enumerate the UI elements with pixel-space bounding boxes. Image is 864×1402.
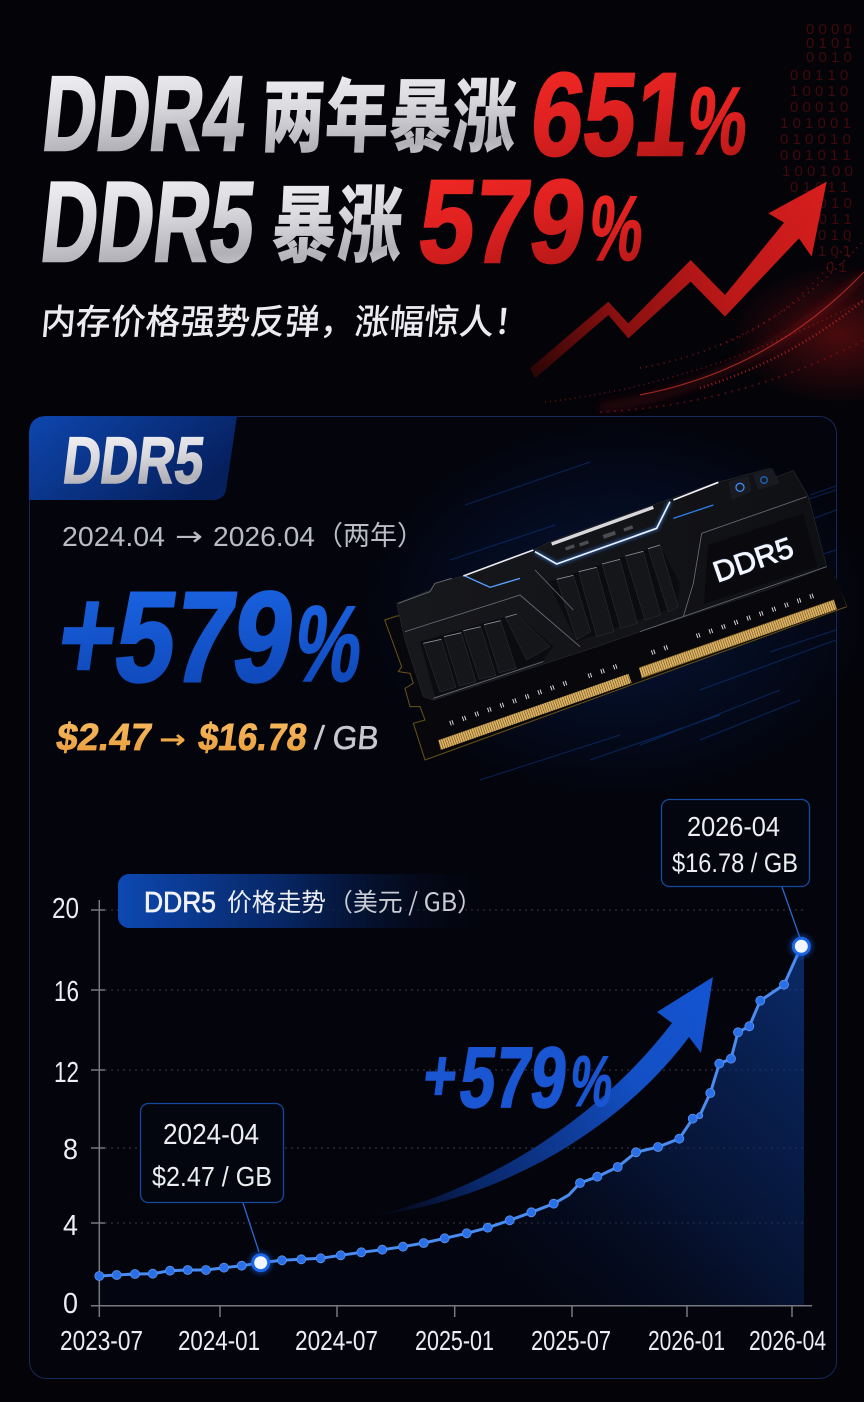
y axis labels: 20 [52, 893, 79, 925]
y axis labels [52, 893, 79, 1320]
x axis labels: 2025-07 [531, 1325, 611, 1356]
panel background [30, 416, 836, 1378]
x axis labels: 2025-01 [415, 1325, 494, 1356]
title line 1: percent: % [683, 68, 753, 175]
big stat: +579%: 579 [107, 567, 303, 709]
chips [450, 593, 820, 723]
circuit board [385, 574, 847, 760]
date range [62, 514, 424, 553]
vents [565, 525, 633, 550]
icon: rising red arrow [530, 182, 827, 378]
x axis labels: 2023-07 [60, 1325, 143, 1356]
chart stat: +579%: % [566, 1042, 618, 1122]
price change [54, 716, 381, 759]
decoration: red data particles: 0 0 0 0 [806, 21, 852, 38]
RAM module [385, 468, 847, 760]
x axis labels: 2024-07 [295, 1325, 378, 1356]
x axis labels: 2024-01 [178, 1325, 260, 1356]
decoration: red data particles: 0 1 0 0 1 0 [780, 131, 851, 148]
x axis labels [60, 1325, 826, 1356]
decoration: blue tech streaks [450, 462, 836, 780]
panel: DDR5 [29, 416, 864, 1378]
chart stat: +579%: + [419, 1036, 462, 1116]
callout: 2026-04: $16.78 / GB [672, 848, 798, 878]
price change: $16.78 [196, 716, 310, 759]
RAM label: DDR5 [709, 531, 798, 589]
left fins [423, 614, 550, 692]
date range: 2024.04 [62, 521, 165, 552]
decoration: red data particles: 0 0 1 0 [806, 49, 852, 66]
date range: 2026.04 [213, 521, 315, 552]
panel glow [360, 420, 864, 800]
highlight point: 2024-04 [249, 1251, 273, 1275]
decoration: red data particles: 0 1 0 1 1 [790, 179, 848, 196]
decoration: red data particles: 0 0 1 1 0 [790, 67, 848, 84]
price line [99, 946, 801, 1276]
decoration: red data particles: 1 0 1 1 [806, 211, 852, 228]
callout: 2024-04: 2024-04 [163, 1119, 259, 1151]
chart title pill: DDR5 [144, 887, 216, 919]
grid lines [105, 910, 804, 1223]
title [35, 49, 753, 288]
price change: → [159, 725, 186, 755]
title line 1: Chinese: 两年暴涨 [259, 53, 520, 169]
decoration: red data particles: 1 0 1 0 0 1 [780, 115, 851, 132]
y axis labels: 0 [63, 1288, 78, 1320]
centre fins [557, 545, 678, 640]
title line 2: DDR5: DDR5 [35, 159, 261, 286]
gold contacts [438, 599, 837, 750]
chart title pill [118, 874, 503, 928]
area under line [99, 946, 804, 1305]
date range: （两年） [316, 514, 424, 553]
y axis labels: 8 [63, 1134, 78, 1166]
data points [95, 980, 789, 1280]
glowing light bar [463, 482, 718, 587]
big stat: +579%: % [288, 583, 371, 704]
decoration: red data particles: 1 0 0 1 0 [790, 83, 848, 100]
decoration: red data particles: 1 0 0 1 0 0 [782, 163, 853, 180]
title line 1: DDR4: DDR4 [38, 54, 251, 173]
y axis labels: 4 [63, 1210, 78, 1242]
axes [91, 900, 812, 1317]
buttons [728, 468, 779, 500]
y axis labels: 12 [54, 1057, 79, 1089]
title line 2: 579: 579 [413, 156, 592, 288]
decoration: red data particles: 0 1 0 [818, 227, 851, 244]
line chart [52, 800, 826, 1356]
big curved arrow [372, 977, 713, 1216]
callout: 2024-04 [140, 1104, 284, 1252]
dark recess centre [548, 545, 680, 642]
decoration: red data particles [545, 21, 864, 412]
heat spreader [397, 468, 827, 700]
date range: → [175, 522, 203, 552]
callout: 2026-04 [662, 800, 810, 938]
subtitle: 内存价格强势反弹，涨幅惊人！ [39, 294, 531, 345]
title line 1: 651: 651 [525, 49, 695, 181]
decoration: red data particles: 0 0 1 0 [806, 195, 852, 212]
fin top highlights [423, 545, 660, 643]
DDR5 plate [704, 513, 817, 604]
x axis labels: 2026-04 [749, 1325, 826, 1356]
price change: $2.47 [54, 716, 155, 759]
highlight point: 2026-04 [789, 934, 813, 958]
decoration: red data particles: 0 1 0 1 [806, 35, 852, 52]
callout: 2026-04: 2026-04 [687, 811, 780, 842]
decoration: red data particles: 1 0 1 [818, 243, 851, 260]
decoration: red data particles: 0 1 [826, 259, 847, 276]
title line 2: percent: % [585, 176, 649, 280]
callout: 2024-04: $2.47 / GB [152, 1161, 272, 1192]
dark recess [420, 613, 553, 697]
chart title pill: （美元 / GB） [328, 883, 482, 919]
y axis labels: 16 [54, 976, 79, 1008]
decoration: red data particles: 0 0 1 0 1 1 [780, 147, 851, 164]
tab: DDR5: DDR5 [59, 424, 208, 498]
decoration: red data particles: 0 0 0 1 0 [790, 99, 848, 116]
title line 2: Chinese: 暴涨 [269, 159, 406, 280]
outline strokes [398, 497, 827, 698]
RAM label: DDR5 [709, 531, 798, 589]
x axis labels: 2026-01 [648, 1325, 725, 1356]
big stat: +579%: + [50, 562, 127, 707]
chart title pill: 价格走势 [227, 883, 326, 919]
chart stat: +579%: 579 [455, 1030, 572, 1126]
price change: / GB [313, 720, 381, 757]
